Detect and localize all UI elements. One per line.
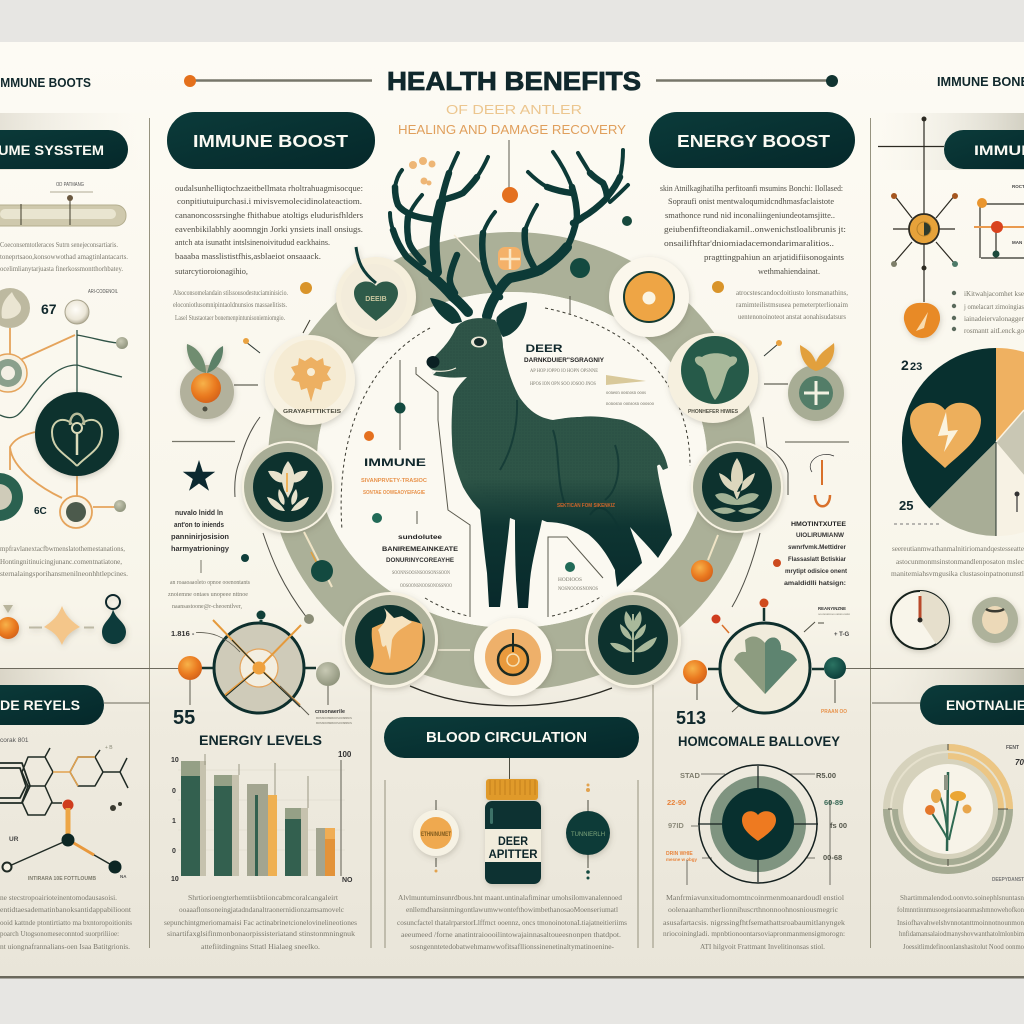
text block: immune boost: Lasel Stustaotaer bonemenpintunisoniemiomgio. (175, 314, 285, 322)
text block: blood circulation (397, 893, 627, 951)
icon: small pin right (764, 340, 782, 356)
connectors left (234, 320, 310, 385)
text: deer label: nonosno oonsosn ooosoo (606, 402, 654, 407)
text block: immune boost: eavenbikilabhly aoomngjn Jorki ynsiets inall onsiugs. (175, 224, 363, 234)
icon: small sage ball (116, 337, 128, 349)
text block: energy levels: Shrtiorioengterhemtiisbtiioncabmcoralcangaleirt (188, 893, 339, 902)
icon: orange fruit (180, 344, 234, 419)
text: immune label: IMMUNE (364, 457, 426, 469)
icon: bottom-center target medallion (474, 618, 552, 696)
icon: sage animal badge (972, 597, 1018, 643)
icon: dark badge (566, 811, 610, 855)
text: deer label: AP HOP JOPPO IO HOPN OPSNNE (530, 369, 598, 374)
text: deer label: DARNKDUIER"SGRAGNIY (524, 357, 605, 364)
text block: immune boost: baaaba masslististfhis,asblaeiot onsaaack. (175, 251, 321, 261)
text: deer label (524, 343, 654, 407)
pill: immune right: IMMUN (974, 142, 1024, 158)
icon: cream flower medallion: GRAYAFITTIKTEIS (283, 409, 341, 415)
list: right bullets: iainadeiervalonagger (964, 315, 1024, 323)
text block: energy boost: geiubenfifteondiakamil..onwenichstloalibrunis jt: (664, 224, 846, 234)
icon: sage plus with leaves (788, 343, 844, 421)
axis labels (666, 771, 847, 862)
text block: hormonal: nriocoiningladi. mpnbtionoontarsoviapronmanmensigmorogn: (663, 929, 845, 938)
panel: left immune system gauge: Coeconsemtotleraces Sutrn senejeconsartiaris. (0, 241, 118, 249)
icon: green node top (570, 258, 590, 278)
axis labels: STAD (680, 771, 700, 780)
right-side note text: Flassaslatt Bctiskiar (788, 556, 846, 563)
deer illustration: SEKTICAN FOM SIKENKIZ (557, 503, 616, 509)
connector right (764, 383, 788, 385)
panel: left immune system gauge: ocelimlianytarjuasta finerkossmontthorhbatey. (0, 265, 123, 273)
right-side note text: amaldidlli hatsign: (784, 580, 846, 587)
list: right bullets (952, 290, 1024, 335)
bar chart: energy levels: 10 (171, 757, 179, 764)
heart gauge right: + T-G (834, 632, 850, 638)
text block: energy boost: uentenonoinoteot anstat aonahisudatsurs (738, 313, 846, 321)
icon: orange badge: ETHNINUMET (421, 832, 451, 838)
axis labels: 60-89 (824, 798, 843, 807)
text block: molecule (0, 893, 132, 951)
label: 6c: 6C (34, 506, 47, 517)
heart gauge right (676, 598, 850, 728)
text block: left lower: Hontingnitinuicingjunanc.comentnatiatone, (0, 558, 122, 566)
connector bead: right orange bead (691, 535, 718, 582)
panel: top-right starburst diagram (878, 116, 958, 338)
text block: molecule: poarch Utogsonomeseconntod suorpriliioe: (0, 929, 119, 938)
pill: enotnalie (920, 685, 1024, 725)
text: small bead and notes: sundolutee (398, 534, 442, 541)
icon: bottle: DEER (498, 836, 529, 848)
pill: immune system: UME SYSSTEM (0, 142, 104, 158)
text block: blood circulation: cosuncfactel thatalrparstorLlffrnct ooennz, oncs tmonoinotonaLtiajatneitieriims (397, 918, 627, 927)
panel: top-right mini chart (974, 184, 1024, 258)
icon: green leaf medallion: PHONHEFER HIWIES (688, 409, 738, 415)
text block: energy levels: sinartifaxglsifinmonbonaorpissisteriatand stinstonmningnuk (167, 929, 355, 938)
text block: star note: znoiemne ontaes unopeee nttnoe (168, 592, 248, 598)
title: OF DEER ANTLER (446, 102, 582, 117)
icon: ring node lower (60, 496, 92, 528)
text block: immune boost: oudalsunhelliqtochzaeitbellmata rholtrahuagmisocque: (175, 183, 363, 193)
pill: immune system (0, 130, 128, 169)
text block: blood circulation: enllemdhansinmingontlawumwwontefthowimbethanosaoMoenseriumatl (406, 905, 618, 914)
label: arc: ARI-CODENOIL (88, 289, 118, 295)
heading: energy levels: ENERGIY LEVELS (199, 732, 322, 748)
pill: enotnalie: ENOTNALIE (946, 698, 1024, 713)
label: 223: 2 (901, 357, 909, 373)
ring chart: botanical: 70 (1015, 758, 1024, 767)
icon: sage leaf medallion (0, 288, 30, 328)
text block: star note (168, 442, 251, 610)
icon: gold bead (300, 282, 312, 294)
axis labels: DRIN WHIE (666, 851, 693, 857)
text block: molecule: entidtaesadematinbanoksantidappabilioont (0, 905, 132, 914)
icon: green ring (0, 473, 23, 521)
icon: orange badge (413, 810, 459, 856)
icon: dark heart medallion (35, 392, 119, 476)
label: 513: 513 (676, 708, 706, 728)
text block: left lower (0, 545, 128, 578)
title: HEALING AND DAMAGE RECOVERY (398, 123, 627, 137)
text block: left lower: sternalaingsporihansmenilneonhhtlepcines. (0, 570, 128, 578)
text block: star note: ant'on to iniends (174, 520, 224, 529)
icon: small pearl (114, 500, 126, 512)
molecule labels: INTIRARA 10E FOTTLOUMB (28, 876, 96, 882)
icon: green leaf medallion (668, 333, 758, 423)
text: sub-note right of legs (548, 537, 603, 617)
icon: ring node left (0, 354, 27, 392)
molecule diagram (0, 748, 128, 874)
connector bead: left green bead (304, 532, 333, 587)
icon: bottle: APITTER (488, 849, 538, 861)
icon: dark flower medallion (242, 441, 334, 533)
text block: energy levels: sepunchintgmeriomamaisi Fac actinabrinetcionelovinelineotiones (164, 918, 357, 927)
text: small bead and notes: BANIREMEAINKEATE (382, 546, 459, 553)
title (184, 66, 838, 137)
bottle and badges (413, 758, 610, 884)
icon: cream flower medallion (265, 335, 355, 425)
icon: orange target medallion (609, 257, 689, 337)
text block: star note: nuvalo lnidd ln (175, 508, 223, 517)
right-side note text: mrytipt odisice onent (785, 568, 848, 575)
molecule labels: NA (120, 874, 127, 879)
icon: heart medallion: DEEIB (365, 296, 387, 303)
text block: molecule: ne stecstropoairioteinentomodausasoisi. (0, 893, 117, 902)
text block: blood circulation: Alvlmuntuminsunrdbous.hnt maant.untinalafiminar umohsilomvanalennoed (398, 893, 622, 902)
notes: FENT (1006, 745, 1019, 751)
text: deer label: DEER (526, 343, 563, 355)
label: 67: 67 (41, 301, 57, 317)
icon: dark sprout medallion (691, 441, 783, 533)
text block: hormonal: Manfrmiavunxitudomomtncoinrmenmoanardoudl enstiol (666, 893, 844, 902)
pill: de reyels (0, 685, 104, 725)
text block: star note: panninirjosision (171, 532, 229, 541)
text block: immune boost: Alsoconsomelandain stilssousodestuciaminisicio. (173, 289, 288, 297)
text block: star note: an roaaoaaoleto opnoe ooenontants (170, 580, 251, 586)
text: deer label: ooneon oosnosn ooos (606, 391, 646, 396)
panel: top-right mini chart: MAN (1012, 240, 1022, 245)
bar chart: energy levels: 0 (172, 848, 176, 855)
heart gauge right: ooonosnnoooonsnoosnn (818, 612, 850, 616)
icon: green bead top (622, 216, 632, 226)
text: immune label: SONTAE OOWEAOYEIFAGIE (363, 490, 425, 496)
bar chart: energy levels: 100 (338, 750, 352, 759)
text block: right mid: seereutianmwathanmalnitiriomandqestesseatte (892, 545, 1024, 553)
icon: plus sign orange (498, 247, 521, 270)
text block: immune boost: sutarcytioroionagihio, (175, 266, 248, 276)
molecule labels: corak 801 (0, 737, 29, 744)
icon: heart medallion (336, 247, 416, 337)
text: immune label (361, 402, 427, 496)
heading: hormonale balance: HOMCOMALE BALLOVEY (678, 733, 841, 749)
text: sub-note right of legs: NOSNOOOSNONOS (558, 587, 598, 592)
axis labels: 00-68 (823, 853, 842, 862)
bar chart: energy levels: 1 (172, 818, 176, 825)
right-side note text: HMOTINTXUTEE (791, 521, 847, 528)
text block: energy boost: wethmahiendainat. (758, 266, 820, 276)
icon: dark badge: TUNNIERLH (571, 832, 605, 838)
text: small bead and notes (372, 511, 459, 589)
text block: immune boost: antch ata isunatht intslsinenoivitudud eackhains. (175, 237, 330, 247)
icon: clock gauge (891, 591, 949, 649)
pie chart (894, 348, 1024, 536)
text: sub-note right of legs: HODIOOS (558, 578, 582, 583)
list: right bullets: rosmantt aitLenck.go (964, 327, 1024, 335)
text block: molecule: ooid kattnde ptontirtiatto ma bxntoropoitionits (0, 918, 132, 927)
text block: energy levels: ooaaaflonsoneingjatadndanaltraonernidionzamsamovelc (179, 905, 345, 914)
text block: immune boost: eloconiotlusomnipintaoldnunsios massaelitists. (173, 301, 287, 309)
text block: right mid: astocunmonmsinstonmandlenposaton mslec (896, 558, 1024, 566)
label: 25: 25 (899, 498, 913, 513)
icon: bottle (485, 779, 541, 884)
bar chart: energy levels (171, 750, 353, 884)
radial gauge left (171, 610, 352, 729)
text: small bead and notes: DONURINYCOREAYHE (386, 557, 455, 564)
pill: blood circulation: BLOOD CIRCULATION (426, 730, 587, 746)
text block: hormonal (663, 893, 845, 951)
pill: de reyels: DE REYELS (0, 698, 80, 713)
text block: immune boost: conpitiutuipurchasi.i mivisvemolecidinolateactiom. (177, 196, 362, 206)
icons: left lower row (0, 595, 126, 645)
panel: left immune system gauge: OD PATMANG (56, 182, 84, 188)
text block: hormonal: oolenaanhamtherlionnihuscrthnonnoohnosniousmegric (668, 905, 839, 914)
icon: bottom-left deer medallion (342, 592, 438, 688)
molecule labels (0, 737, 127, 882)
bar chart: energy levels: 0 (172, 788, 176, 795)
text block: blood circulation: aeeumeed /forne anatintraioooilintowajainnasaltoueesnonpen thatdpot. (401, 930, 621, 939)
icon: flower sprigs (409, 157, 436, 186)
panel: left flow diagram (0, 288, 128, 528)
pill: immune right (944, 130, 1024, 169)
text block: hormonal: asusafartacsis. nigrssingfhtfsemathattsroabaumitlanyngek (663, 918, 845, 927)
text: small bead and notes: SOONNSOOSNSOOSONSSOON (392, 571, 450, 576)
pill: energy boost (649, 112, 855, 168)
radial gauge left: nosnoonsnoosoosnnos (316, 715, 352, 720)
text block: immune boost (173, 183, 363, 322)
text block: energy levels: attefiitdingnins Sttatl Hialaeg sneelko. (201, 942, 320, 951)
icon: pearl node (65, 300, 89, 324)
icon: gold bead right (712, 281, 724, 293)
text block: energy levels (164, 893, 357, 951)
axis labels: mesne w obgy (666, 857, 698, 862)
molecule labels: + B (105, 745, 113, 751)
text block: energy boost: Sopraufi onist mentwaloqumidcndhmasfaclaistote (668, 196, 834, 206)
icon: small pin left (243, 338, 260, 353)
icon: heart with bolt (910, 403, 981, 468)
note small: cnsonaerile (315, 709, 345, 715)
axis labels: 22-90 (667, 798, 686, 807)
text block: star note: naansastoone@r-cheoentlver, (172, 604, 242, 610)
text block: energy boost: pragttingpahiun an arjatidifiisonogaints (704, 252, 844, 262)
title: HEALTH BENEFITS (387, 66, 641, 96)
label: 1.816: 1.816 - (171, 629, 195, 638)
text block: right mid: manitemiahsvmgusika clustasoinpatnonunstl (891, 570, 1024, 578)
icon: bottom-right leaf medallion (585, 592, 681, 688)
text block: energy boost: ramimteilistmsusea pemeterpterlionaim (736, 301, 849, 309)
text block: right bottom (897, 893, 1024, 951)
right-side note text: swnrfvmk.Mettidrer (788, 544, 846, 551)
text block: energy boost: skin Atnilkagihatilha perfitoanfi msumins Bonchi: Ilollased: (660, 183, 843, 193)
text block: energy boost: atrocstescandocdoitiusto lonsmanathins, (736, 289, 848, 297)
ring chart: botanical (883, 744, 1024, 883)
axis labels: 97ID (668, 821, 684, 830)
text block: energy boost: onsailifhftar'dniomiadacemondarimaralitios.. (664, 238, 834, 248)
radial gauge left: nosnoonsnoosoosnnos (316, 720, 352, 725)
pill: energy boost: ENERGY BOOST (677, 131, 830, 151)
icon: amber heart gem (904, 303, 940, 338)
text block: right mid (891, 545, 1024, 578)
text block: immune boost: cananoncossrsinghe fhithabue atoltigs eludurisfhlders (175, 210, 363, 220)
bar chart: energy levels: NO (342, 877, 353, 884)
text: small bead and notes: OOSOONSNOOSONOSSNOO (400, 584, 452, 589)
text: deer label: HPOS ION OPN SOO JOSOO JNOS (530, 382, 596, 387)
target chart (666, 765, 847, 885)
list: right bullets: iKitwahjacomhet kse (964, 290, 1024, 298)
text block: left lower: mpfravlanextacfbwmenslatothemestanations, (0, 545, 125, 553)
right-side note text: UIOLIRUMIANW (796, 533, 844, 539)
panel: left immune system gauge (0, 182, 128, 273)
right-side note text (773, 442, 849, 587)
axis labels: R5.00 (816, 771, 836, 780)
text block: blood circulation: sosngenntetedobatwehmanwwofitsafllionssinenetinaltymatinoenine- (410, 942, 614, 951)
text block: energy boost: smathonce rund nid inconaliingeniundeotamsjitte.. (665, 210, 835, 220)
text block: molecule: nt uiongnafrannalians-oen Isaa Batitgrionis. (0, 942, 130, 951)
pill: immune boost (167, 112, 375, 169)
pie chart: 23 (910, 361, 922, 373)
text block: hormonal: ATI hilgvoit Frattmant Invelitinonsas stiol. (700, 942, 825, 951)
text block: energy boost (660, 183, 849, 321)
panel: left immune system gauge: toneprtsaoo,konsowwothad amagtinlantacarts. (0, 253, 128, 261)
ring diagram (235, 140, 788, 706)
text block: star note: harmyatrioningy (171, 544, 230, 553)
label: 55: 55 (173, 707, 195, 729)
axis labels: fs 00 (830, 821, 847, 830)
pill: immune boost: IMMUNE BOOST (193, 131, 348, 151)
bar chart: energy levels: 10 (171, 876, 179, 883)
deer illustration (390, 150, 672, 608)
note: orange: PRAAN OO (821, 709, 847, 715)
molecule labels: UR (9, 836, 19, 843)
text: immune label: SIVANPRVETY-TRASIOC (361, 478, 427, 484)
icon: orange bead (502, 187, 518, 203)
note: top: REANYINZNE (818, 606, 846, 611)
pill: blood circulation (384, 717, 639, 758)
